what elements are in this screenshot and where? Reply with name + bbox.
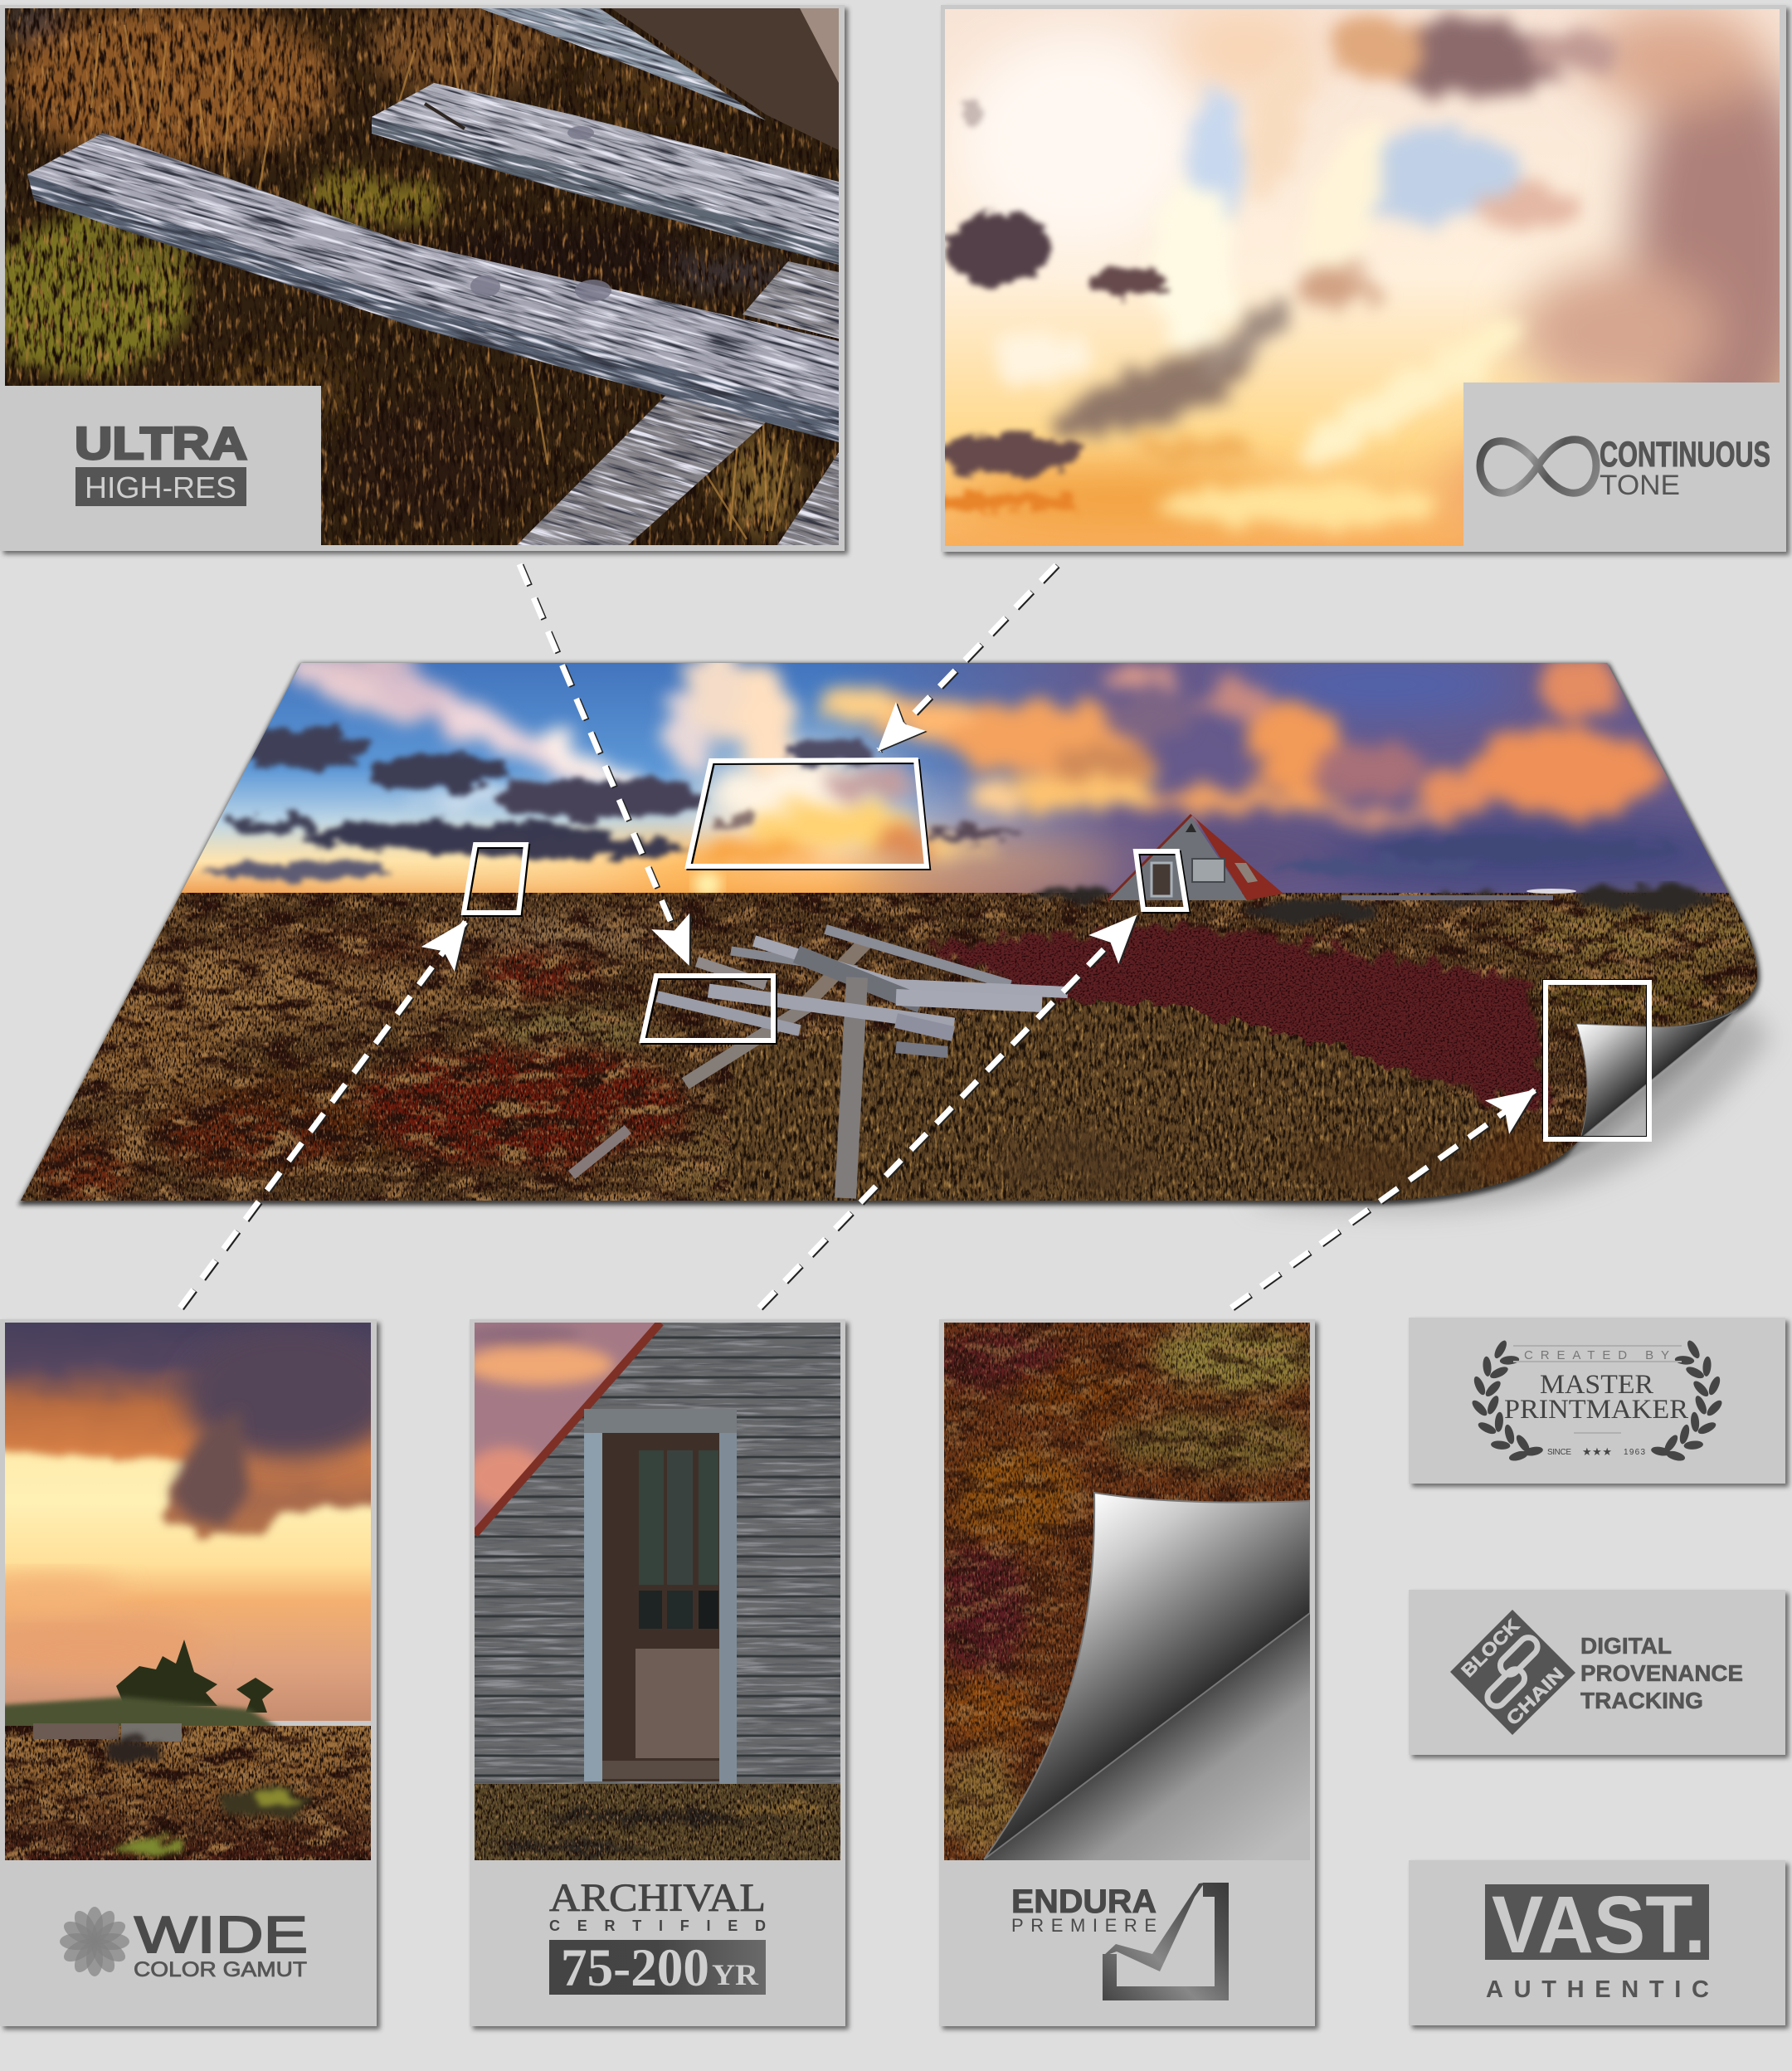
panel: endura premiere: [929, 1319, 1320, 2030]
icon: laurel wreath: [1470, 1338, 1724, 1463]
label block: ultra high-res: ULTRA: [75, 417, 247, 469]
badge: blockchain provenance: TRACKING: [1580, 1688, 1703, 1713]
icon: blockchain diamond: BLOCK: [1457, 1615, 1523, 1681]
ground: [0, 886, 1792, 1220]
panel: wide color gamut: [0, 1245, 431, 2030]
logo: archival certified: [549, 1876, 766, 1998]
badge: master printmaker: 1963: [1624, 1448, 1645, 1457]
logo: endura premiere: PREMIERE: [1011, 1915, 1157, 1936]
red heath patches: [37, 942, 689, 1195]
icon: blockchain diamond: CHAIN: [1502, 1663, 1568, 1729]
logo: wide color gamut: COLOR GAMUT: [134, 1958, 307, 1981]
panel: continuous tone sky detail: [936, 5, 1792, 555]
poster underside below fold: [1568, 1009, 1738, 1157]
badge: blockchain provenance: DIGITAL: [1580, 1633, 1672, 1659]
logo: archival certified: ARCHIVAL: [549, 1876, 766, 1920]
photo: glowing sunset clouds: [936, 8, 1792, 548]
icon: petal flower: [60, 1907, 129, 1976]
photo: curled corner close-up: [929, 1321, 1320, 1860]
selection frame: sky: [688, 760, 928, 868]
grassy hill: [730, 1000, 1576, 1220]
badge: master printmaker: SINCE: [1547, 1448, 1571, 1457]
badge: master printmaker: PRINTMAKER: [1504, 1395, 1688, 1425]
logo: archival certified: YR: [712, 1958, 759, 1991]
badge: master printmaker: [1409, 1318, 1789, 1487]
badge: vast authentic: VAST.: [1492, 1879, 1706, 1970]
wood pile: [572, 929, 1068, 1198]
logo: wide color gamut: [60, 1907, 308, 1981]
badge: master printmaker: MASTER: [1540, 1370, 1653, 1400]
door: [584, 1409, 737, 1785]
selection frame: curled corner: [1544, 981, 1649, 1139]
logo: endura premiere: [1011, 1883, 1229, 2000]
selection frame: planks: [642, 976, 775, 1042]
label block: ultra high-res: [0, 386, 321, 551]
icon: ribbon check: [1103, 1883, 1229, 2000]
poster curled corner flap: [1576, 1009, 1738, 1138]
planks: [27, 8, 839, 545]
peeled flap: [984, 1493, 1310, 1859]
selection frame: distant trees: [464, 845, 528, 914]
red gravel patch: [924, 924, 1551, 1112]
trees: [116, 1640, 274, 1713]
photo: cloud over trees at sunset: [0, 1245, 431, 1860]
arrow: endura panel to curl frame: [1231, 1090, 1536, 1308]
logo: endura premiere: ENDURA: [1011, 1883, 1157, 1920]
photo: weathered wooden planks: [5, 8, 839, 545]
badge: blockchain provenance: [1409, 1590, 1789, 1758]
sky: [178, 663, 1732, 899]
logo: archival certified: CERTIFIED: [549, 1918, 766, 1934]
photo: hut door close-up: [465, 1323, 840, 1860]
panel: archival certified: [465, 1319, 849, 2030]
cirrus streaks: [287, 663, 810, 816]
photo: panoramic sunset over moorland: [21, 663, 1757, 1201]
selection frame: hut door: [1136, 851, 1188, 911]
logo: archival certified: 75-200: [561, 1938, 709, 1998]
icon: infinity ribbon: [1480, 440, 1596, 493]
hut: [1108, 815, 1283, 900]
icon: blockchain diamond: [1450, 1610, 1575, 1735]
hut wall: [475, 1323, 840, 1786]
arrow: wide gamut panel to trees frame: [180, 922, 467, 1308]
arrow: archival panel to door frame: [759, 916, 1137, 1308]
lower sheet: [984, 1613, 1310, 1860]
label block: continuous tone: TONE: [1600, 470, 1680, 501]
arrow: sky panel to sky frame: [879, 565, 1058, 751]
arrow: wood panel to planks: [519, 564, 690, 965]
logo: wide color gamut: WIDE: [134, 1907, 308, 1964]
badge: blockchain provenance: PROVENANCE: [1580, 1660, 1743, 1686]
label block: continuous tone: [1463, 383, 1786, 552]
badge: vast authentic: AUTHENTIC: [1486, 1976, 1709, 2003]
badge: vast authentic: [1409, 1860, 1789, 2029]
label block: ultra high-res: HIGH-RES: [85, 470, 236, 504]
panel: ultra high-res wood detail: [0, 5, 851, 843]
badge: master printmaker: ★★★: [1582, 1446, 1612, 1459]
poster: curled panoramic landscape print: [0, 639, 1792, 1220]
badge: master printmaker: CREATED BY: [1524, 1348, 1669, 1362]
